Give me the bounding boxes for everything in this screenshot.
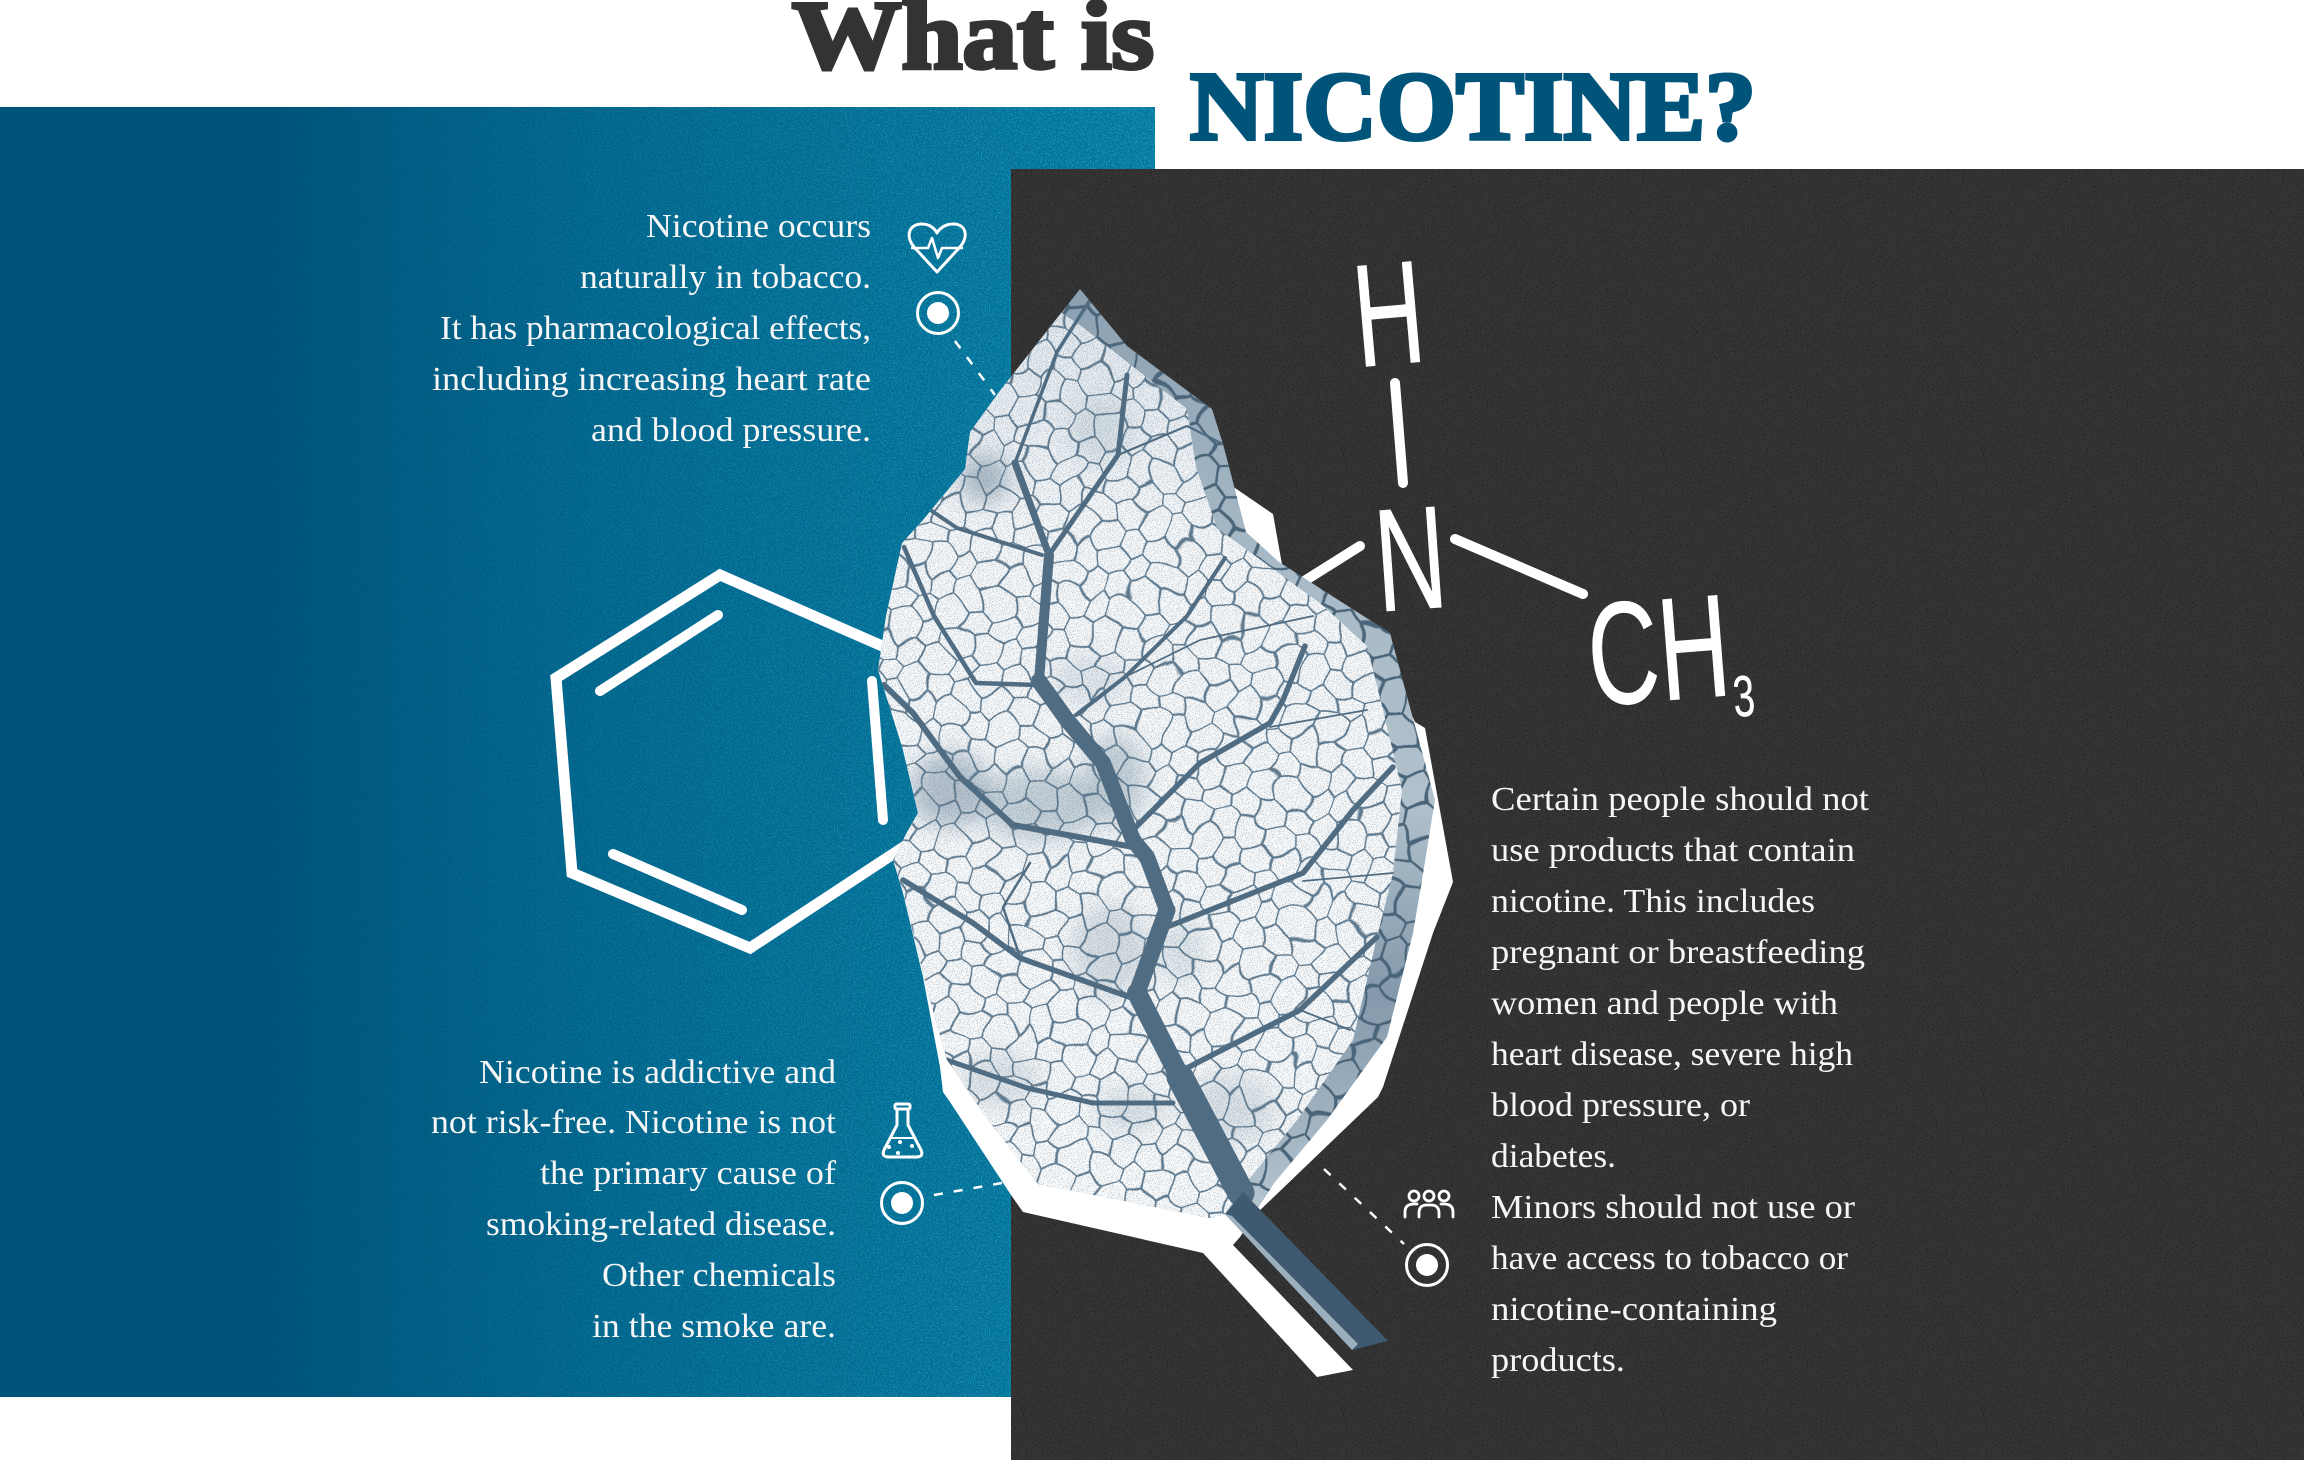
chart: benzene ring molecule: [556, 575, 925, 948]
connector: top dashed line: [955, 341, 995, 395]
chart: N-H-CH3 molecule: 3: [1731, 664, 1757, 730]
connector: right dashed line: [1324, 1169, 1404, 1244]
text: who should not use nicotine: products.: [1491, 1342, 1625, 1379]
connector: left dashed line: [934, 1183, 1002, 1195]
title: NICOTINE?: [1190, 53, 1756, 161]
text: nicotine occurs naturally: including increasing heart rate: [432, 361, 871, 398]
text: addictive and not risk-free: the primary cause of: [540, 1155, 837, 1192]
text: addictive and not risk-free: [431, 1054, 837, 1345]
text: who should not use nicotine: nicotine-containing: [1491, 1291, 1777, 1328]
icon: target marker bottom right: [1406, 1244, 1448, 1286]
chart: N-H-CH3 molecule: H: [1347, 230, 1430, 399]
icon: heart with pulse: [909, 224, 965, 272]
text: who should not use nicotine: Minors should not use or: [1491, 1189, 1856, 1226]
text: who should not use nicotine: have access to tobacco or: [1491, 1240, 1849, 1277]
text: who should not use nicotine: Certain people should not: [1491, 781, 1870, 818]
leaf veins: [884, 300, 1393, 1193]
text: who should not use nicotine: diabetes.: [1491, 1138, 1616, 1175]
text: addictive and not risk-free: in the smoke are.: [592, 1308, 836, 1345]
text: addictive and not risk-free: Other chemicals: [602, 1257, 836, 1294]
panel: dark background: [1011, 169, 2304, 1460]
chart: N-H-CH3 molecule: N: [1370, 476, 1451, 643]
text: who should not use nicotine: pregnant or breastfeeding: [1491, 934, 1865, 971]
text: nicotine occurs naturally: naturally in tobacco.: [580, 259, 871, 296]
leaf stem: [1225, 1192, 1388, 1350]
text: nicotine occurs naturally: It has pharmacological effects,: [440, 310, 871, 347]
text: who should not use nicotine: [1491, 781, 1870, 1379]
icon: target marker top: [918, 292, 958, 334]
text: nicotine occurs naturally: and blood pressure.: [591, 412, 871, 449]
icon: flask: [883, 1104, 922, 1157]
icon: target marker bottom left: [882, 1182, 922, 1224]
leaf blade: [860, 280, 1460, 1230]
text: addictive and not risk-free: not risk-free. Nicotine is not: [431, 1104, 837, 1141]
text: who should not use nicotine: nicotine. This includes: [1491, 883, 1815, 920]
text: addictive and not risk-free: Nicotine is addictive and: [479, 1054, 836, 1091]
chart: N-H-CH3 molecule: [1290, 230, 1757, 741]
text: who should not use nicotine: blood pressure, or: [1491, 1087, 1751, 1124]
leaf illustration: [860, 280, 1460, 1377]
text: who should not use nicotine: use products that contain: [1491, 832, 1855, 869]
text: nicotine occurs naturally: Nicotine occurs: [646, 208, 871, 245]
title: [792, 0, 1756, 161]
text: nicotine occurs naturally: [432, 208, 871, 449]
icon: people group: [1405, 1191, 1453, 1217]
white leaf silhouette: [895, 488, 1453, 1377]
chart: N-H-CH3 molecule: CH: [1582, 565, 1735, 738]
panel: blue background: [0, 107, 1155, 1397]
text: addictive and not risk-free: smoking-related disease.: [486, 1206, 836, 1243]
text: who should not use nicotine: heart disease, severe high: [1491, 1036, 1853, 1073]
text: who should not use nicotine: women and people with: [1491, 985, 1838, 1022]
